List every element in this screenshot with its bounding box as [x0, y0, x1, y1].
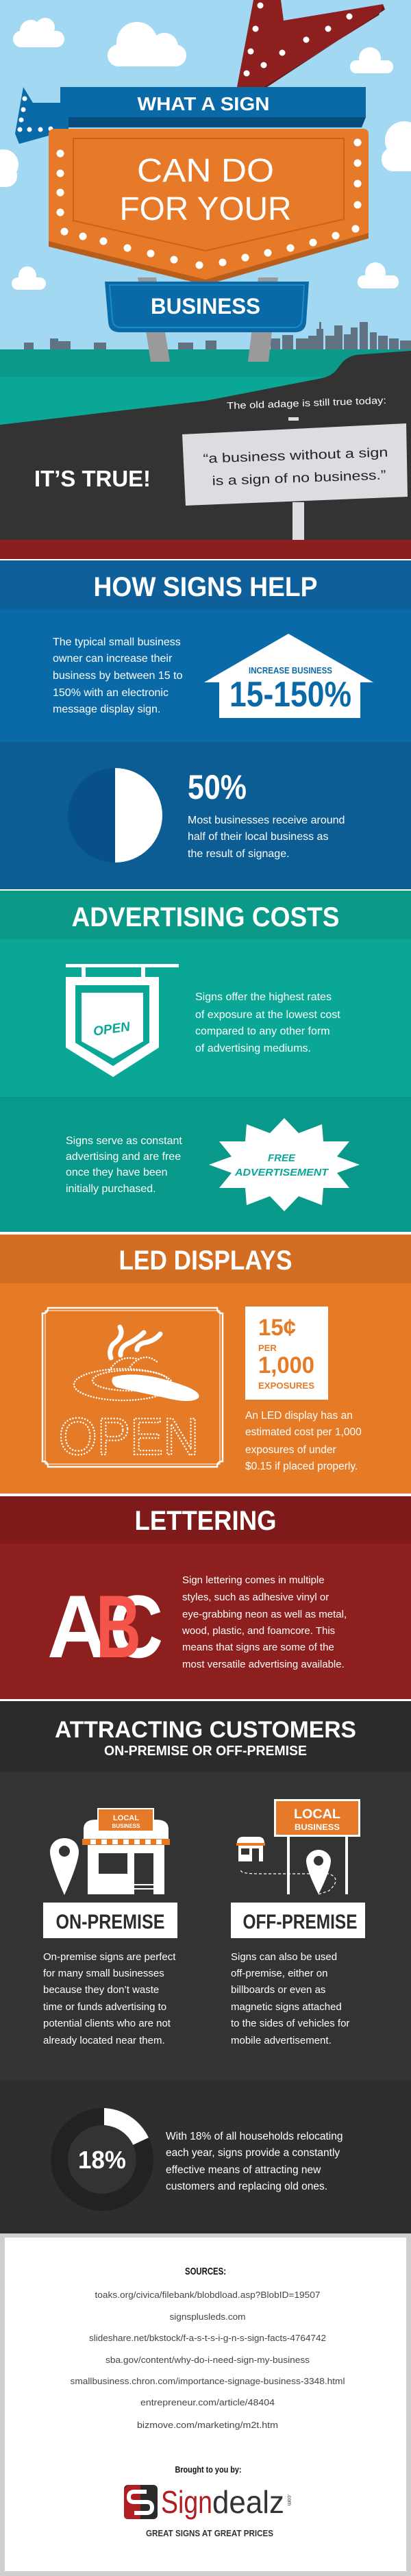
callout: 15 cents per 1,000: 15¢: [258, 1315, 296, 1341]
text block: highest rates: [195, 991, 340, 1054]
skyline: [24, 322, 411, 349]
heading sign: CAN DO FOR YOUR: [49, 129, 369, 285]
heading: attracting customers: ATTRACTING CUSTOMERS: [55, 1717, 356, 1743]
heading: sources: SOURCES:: [185, 2266, 226, 2277]
sign poles: [138, 277, 170, 362]
panel: attracting customers: [0, 1701, 411, 2233]
panel: advertising costs: [0, 891, 411, 1232]
callout: 15 cents per 1,000: EXPOSURES: [258, 1380, 314, 1391]
text: old adage intro: [227, 395, 386, 421]
text block: on-premise: for many small businesses: [43, 1968, 164, 1979]
text block: increase business: message display sign.: [53, 704, 160, 715]
text block: source list: signsplusleds.com: [170, 2312, 245, 2322]
icon: hanging open sign: [66, 964, 179, 1077]
text block: LED cost: [245, 1410, 362, 1472]
logo: signdealz: dealz: [212, 2484, 284, 2520]
callout: quote sign: [182, 423, 408, 540]
text: tagline: GREAT SIGNS AT GREAT PRICES: [146, 2528, 273, 2538]
text block: source list: toaks.org/civica/filebank/blobdload.asp?BlobID=19507: [95, 2290, 321, 2300]
text block: lettering: eye-grabbing neon as well as metal,: [182, 1609, 347, 1620]
icon: off-premise billboard: BUSINESS: [295, 1822, 340, 1832]
icon: hanging open sign: OPEN: [92, 1019, 132, 1039]
text block: off-premise: off-premise, either on: [231, 1968, 327, 1979]
text block: relocating households: effective means of attracting new: [166, 2164, 321, 2176]
text block: increase business: business by between 15 to: [53, 670, 183, 682]
hero: sky scene: [0, 0, 411, 548]
text block: 50%: 50%: [188, 768, 247, 806]
text block: off-premise: [231, 1951, 349, 2046]
heading: advertising costs: ADVERTISING COSTS: [71, 902, 340, 932]
icon: on-premise store: LOCAL: [113, 1814, 139, 1822]
callout: quote sign: “a business without a sign: [203, 445, 388, 467]
text block: lettering: means that signs are some of the: [182, 1642, 334, 1653]
text block: on-premise: because they don’t waste: [43, 1984, 159, 1996]
text block: highest rates: compared to any other form: [195, 1026, 330, 1037]
text block: on-premise: already located near them.: [43, 2035, 165, 2046]
text block: relocating households: [166, 2131, 342, 2192]
icon: free advertisement starburst: ADVERTISEMENT: [234, 1167, 329, 1178]
text block: 50%: Most businesses receive around: [188, 815, 345, 826]
icon: red arrow sign: [237, 0, 385, 87]
text block: relocating households: With 18% of all households relocating: [166, 2131, 342, 2142]
text block: on-premise: [43, 1951, 176, 2046]
text block: on-premise: time or funds advertising to: [43, 2001, 166, 2013]
callout: 15 cents per 1,000: 1,000: [258, 1352, 314, 1378]
text block: source list: [70, 2290, 345, 2430]
icon: LED open sign: [42, 1308, 223, 1467]
text block: source list: bizmove.com/marketing/m2t.htm: [137, 2420, 278, 2430]
heading: how signs help: HOW SIGNS HELP: [93, 572, 318, 602]
icon: ABC letters: C: [110, 1576, 163, 1676]
icon: ABC letters: B: [96, 1576, 141, 1676]
label: on-premise: ON-PREMISE: [56, 1911, 164, 1933]
text block: LED cost: An LED display has an: [245, 1410, 353, 1422]
text block: relocating households: customers and replacing old ones.: [166, 2181, 327, 2192]
ground and road: [0, 349, 411, 548]
icon: off-premise billboard: [236, 1799, 360, 1894]
text block: increase business: 150% with an electronic: [53, 687, 169, 699]
text block: increase business: [53, 636, 183, 715]
heading banner: WHAT A SIGN: [15, 87, 366, 144]
text block: highest rates: of exposure at the lowest cost: [195, 1009, 340, 1021]
text block: LED cost: estimated cost per 1,000: [245, 1426, 362, 1438]
text block: source list: slideshare.net/bkstock/f-a-s-t-s-i-g-n-s-sign-facts-4764742: [89, 2333, 326, 2343]
text block: off-premise: to the sides of vehicles for: [231, 2018, 349, 2029]
icon: house 15-150%: [204, 634, 373, 718]
callout: 15 cents per 1,000: [245, 1306, 328, 1400]
text block: lettering: [182, 1574, 347, 1670]
panel: attracting customers: ON-PREMISE OR OFF-PREMISE: [104, 1744, 307, 1759]
panel: how signs help: [0, 560, 411, 889]
text block: 50%: [188, 768, 345, 860]
icon: on-premise store: BUSINESS: [112, 1823, 140, 1829]
callout: quote sign: is a sign of no business.”: [212, 468, 386, 488]
text block: on-premise: On-premise signs are perfect: [43, 1951, 176, 1963]
text: old adage intro: The old adage is still true today:: [227, 395, 386, 411]
icon: house 15-150%: 15-150%: [229, 675, 351, 715]
text block: off-premise: billboards or even as: [231, 1984, 325, 1996]
panel: sources footer: [0, 2233, 411, 2576]
text block: relocating households: each year, signs provide a constantly: [166, 2147, 340, 2159]
heading banner: WHAT A SIGN: WHAT A SIGN: [137, 93, 270, 114]
text block: 50%: half of their local business as: [188, 831, 328, 843]
text block: LED cost: exposures of under: [245, 1444, 336, 1456]
panel: led displays: [0, 1235, 411, 1494]
icon: ABC letters: A: [47, 1576, 108, 1676]
text block: lettering: wood, plastic, and foamcore. This: [182, 1625, 335, 1637]
icon: house 15-150%: INCREASE BUSINESS: [249, 665, 332, 676]
text block: source list: smallbusiness.chron.com/importance-signage-business-3348.html: [70, 2376, 345, 2386]
text block: lettering: most versatile advertising available.: [182, 1659, 345, 1670]
heading: IT'S TRUE!: IT’S TRUE!: [34, 466, 151, 491]
text block: increase business: owner can increase their: [53, 653, 173, 665]
label: on-premise: [43, 1903, 177, 1938]
chart: 50% pie: [68, 768, 162, 863]
text block: constant advertising: once they have been: [66, 1167, 168, 1178]
text block: constant advertising: initially purchased.: [66, 1183, 156, 1195]
text block: LED cost: $0.15 if placed properly.: [245, 1461, 358, 1472]
icon: off-premise billboard: LOCAL: [294, 1807, 340, 1822]
clouds: [0, 18, 411, 290]
text block: constant advertising: [66, 1135, 182, 1195]
text block: highest rates: Signs offer the highest rates: [195, 991, 332, 1003]
logo: signdealz: Sign: [161, 2484, 212, 2520]
text block: increase business: The typical small business: [53, 636, 181, 648]
logo: signdealz: .com: [286, 2494, 292, 2506]
callout: 15 cents per 1,000: PER: [258, 1343, 277, 1353]
text block: off-premise: magnetic signs attached: [231, 2001, 342, 2013]
text block: source list: entrepreneur.com/article/48404: [140, 2397, 275, 2407]
text block: constant advertising: Signs serve as constant: [66, 1135, 182, 1147]
icon: free advertisement starburst: FREE: [268, 1152, 296, 1164]
chart: 18% donut: [51, 2108, 153, 2211]
heading: led displays: LED DISPLAYS: [119, 1246, 292, 1276]
panel: lettering: [0, 1496, 411, 1699]
text block: highest rates: of advertising mediums.: [195, 1043, 311, 1054]
heading: lettering: LETTERING: [134, 1506, 277, 1536]
icon: on-premise store: [50, 1808, 170, 1895]
logo: signdealz: [124, 2484, 292, 2538]
text block: lettering: Sign lettering comes in multiple: [182, 1574, 325, 1586]
icon: ABC letters: [47, 1576, 163, 1676]
label: off-premise: [231, 1903, 365, 1938]
icon: LED open sign: OPEN: [59, 1408, 199, 1466]
text block: 50%: the result of signage.: [188, 848, 290, 860]
text block: source list: sba.gov/content/why-do-i-need-sign-my-business: [105, 2355, 310, 2365]
text block: constant advertising: advertising and are free: [66, 1151, 181, 1163]
text block: off-premise: Signs can also be used: [231, 1951, 337, 1963]
chart: 18% donut: 18%: [78, 2146, 126, 2174]
icon: free advertisement starburst: [209, 1118, 360, 1211]
label: off-premise: OFF-PREMISE: [242, 1911, 358, 1933]
heading sign: BUSINESS: [105, 282, 309, 332]
text: brought to you by: Brought to you by:: [175, 2464, 241, 2475]
text block: lettering: styles, such as adhesive vinyl or: [182, 1592, 329, 1603]
text block: off-premise: mobile advertisement.: [231, 2035, 332, 2046]
heading sign: CAN DO FOR YOUR: CAN DO: [137, 153, 274, 189]
text block: on-premise: potential clients who are not: [43, 2018, 171, 2029]
heading sign: CAN DO FOR YOUR: FOR YOUR: [119, 191, 292, 227]
heading sign: BUSINESS: BUSINESS: [151, 294, 260, 319]
